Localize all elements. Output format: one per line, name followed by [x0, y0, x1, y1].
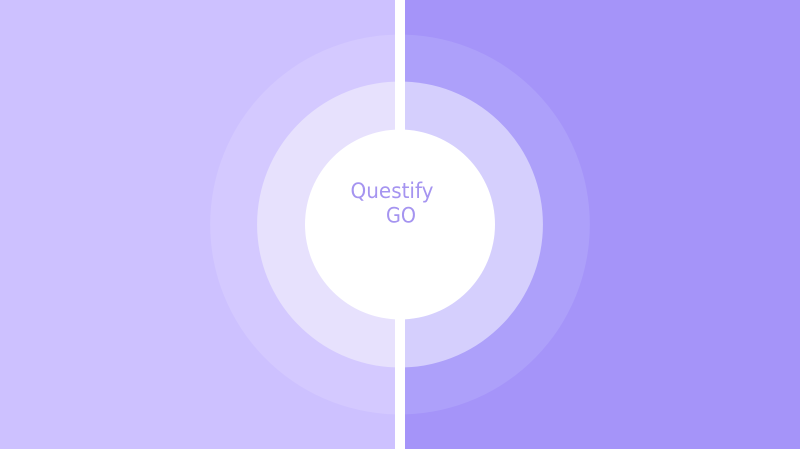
middle ring: left half — [257, 82, 395, 367]
title: Questify — [350, 179, 434, 204]
outer ring: right half — [405, 35, 590, 414]
title — [350, 179, 434, 228]
middle ring: right half — [405, 82, 543, 367]
outer ring: left half — [210, 35, 395, 414]
title: GO — [386, 204, 416, 228]
panel: right background — [405, 0, 800, 449]
center circle — [305, 130, 495, 320]
panel: left background — [0, 0, 395, 449]
center divider — [395, 0, 405, 449]
